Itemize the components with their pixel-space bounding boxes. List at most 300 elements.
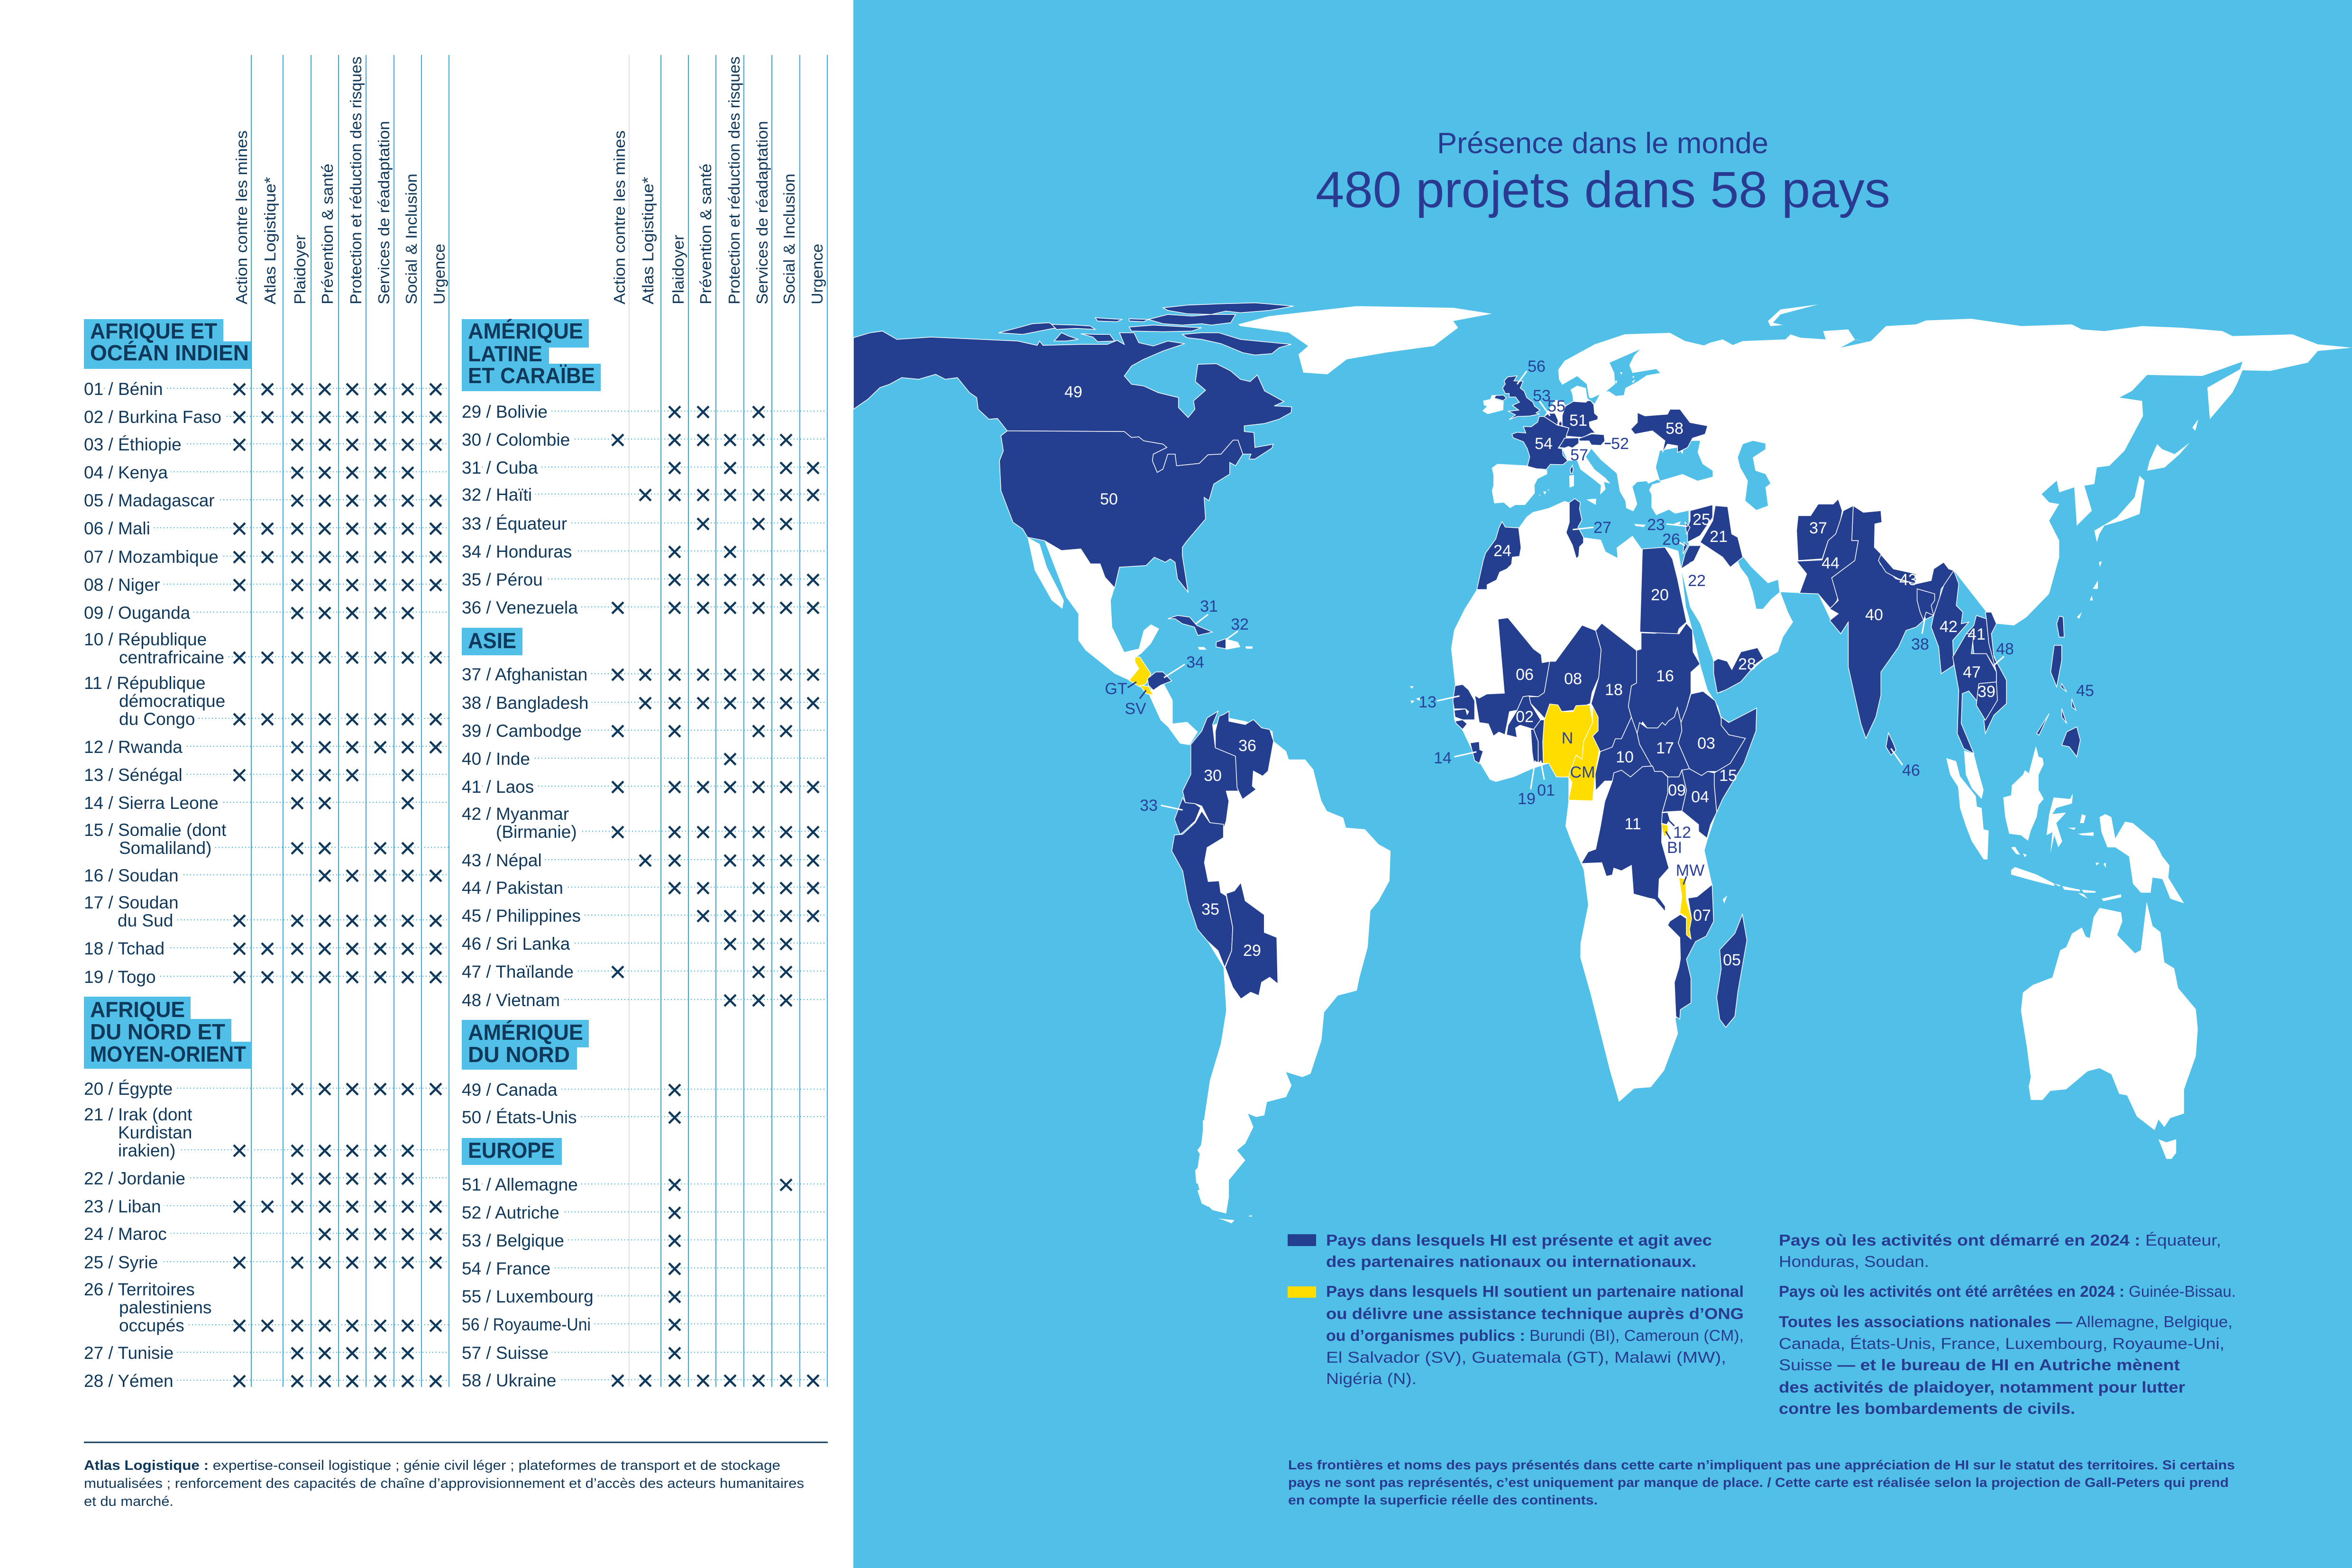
text: activities started in 2024: Pays où les activités ont démarré en 2024 : Équateur, <box>1779 1231 2221 1249</box>
map number labels outside countries: 32 <box>1231 615 1249 633</box>
country: Mali and West Africa block <box>1475 618 1550 736</box>
country: Sri Lanka <box>1886 733 1896 755</box>
row 38 Bangladesh: 38 / Bangladesh <box>462 693 588 713</box>
row 43 Népal <box>462 851 827 870</box>
row 38 Bangladesh <box>462 693 827 713</box>
heading: Afrique et océan Indien: AFRIQUE ET <box>90 319 217 343</box>
rows: Asie <box>462 665 827 1010</box>
map number labels outside countries: 33 <box>1140 797 1158 815</box>
row 32 Haïti <box>462 485 827 504</box>
map number labels on countries: 16 <box>1656 667 1674 685</box>
row 18 Tchad: 18 / Tchad <box>84 939 165 958</box>
map panel background <box>853 0 2352 1568</box>
row 09 Ouganda <box>84 603 449 623</box>
disclaimer: Les frontières et noms des pays présentés dans cette carte n’impliquent pas une appréciation de HI sur le statut des territoires. Si certains <box>1288 1458 2235 1472</box>
footnote: Atlas Logistique: mutualisées ; renforcement des capacités de chaîne d’approvisionnement et d’accès des acteurs humanitaires <box>84 1476 804 1491</box>
row 11 République démocratique du Congo: 11 / République <box>84 673 205 693</box>
country: India <box>1830 505 1954 739</box>
rows: Amérique latine et Caraïbe <box>462 402 827 617</box>
map number labels outside countries: N <box>1562 729 1573 747</box>
row 19 Togo: 19 / Togo <box>84 967 156 987</box>
country: DR Congo <box>1581 766 1669 912</box>
rows: Amérique du Nord <box>462 1080 827 1127</box>
map number labels on countries: 41 <box>1968 625 1986 643</box>
heading: Afrique du Nord et Moyen-Orient: AFRIQUE <box>90 997 185 1022</box>
heading: Afrique du Nord et Moyen-Orient: DU NORD ET <box>90 1019 225 1044</box>
row 21 Irak <box>84 1105 449 1160</box>
text: national associations: Toutes les associations nationales — Allemagne, Belgique, <box>1779 1313 2233 1330</box>
country: Northern Ireland <box>1494 395 1506 401</box>
land: North America whites, Greenland, Caribbean <box>1027 306 1492 745</box>
countries: Asia and Middle East <box>1631 409 2080 757</box>
row 40 Inde <box>462 749 827 769</box>
footnote: Atlas Logistique: Atlas Logistique : expertise-conseil logistique ; génie civil léger ; plateformes de transport et de stockage <box>84 1458 780 1473</box>
row 12 Rwanda: 12 / Rwanda <box>84 737 183 757</box>
title: Présence dans le monde <box>1437 127 1768 160</box>
country: Colombia <box>1183 711 1240 829</box>
map number labels outside countries: 27 <box>1593 519 1611 537</box>
row 11 République démocratique du Congo: du Congo <box>119 709 195 729</box>
row 46 Sri Lanka <box>462 934 827 954</box>
row 51 Allemagne: 51 / Allemagne <box>462 1175 578 1194</box>
heading: Amérique du Nord <box>462 1020 589 1070</box>
row 22 Jordanie <box>84 1169 449 1188</box>
row 32 Haïti: 32 / Haïti <box>462 485 532 504</box>
map number labels on countries: 43 <box>1899 571 1917 589</box>
legend: countries where HI supports a partner: Nigéria (N). <box>1326 1370 1417 1387</box>
legend: countries where HI is present: des partenaires nationaux ou internationaux. <box>1326 1253 1696 1270</box>
row 52 Autriche <box>462 1203 827 1222</box>
row 12 Rwanda <box>84 737 449 757</box>
text: national associations <box>1779 1313 2233 1417</box>
row 24 Maroc <box>84 1224 449 1244</box>
country: Cameroon <box>1568 706 1599 801</box>
country: Sierra Leone <box>1470 742 1483 763</box>
legend: countries where HI supports a partner: El Salvador (SV), Guatemala (GT), Malawi (MW), <box>1326 1348 1726 1366</box>
text: national associations: contre les bombardements de civils. <box>1779 1400 2075 1417</box>
world map <box>853 303 2352 1223</box>
row 10 République centrafricaine: 10 / République <box>84 630 207 649</box>
row 05 Madagascar: 05 / Madagascar <box>84 491 215 510</box>
row 10 République centrafricaine: centrafricaine <box>119 648 224 667</box>
map number labels outside countries: 52 <box>1611 435 1629 453</box>
land: Eurasia, Europe and islands (zoom coords z11) <box>1465 333 1707 608</box>
text: activities started in 2024 <box>1779 1231 2221 1270</box>
country: Sudan <box>1629 623 1700 734</box>
country: Togo and Benin <box>1531 720 1546 763</box>
country: Germany <box>1562 401 1598 438</box>
row 17 Soudan du Sud: 17 / Soudan <box>84 893 179 912</box>
row 34 Honduras: 34 / Honduras <box>462 542 572 561</box>
map number labels on countries: 29 <box>1243 942 1261 960</box>
map number labels on countries: 03 <box>1697 734 1715 752</box>
row 28 Yémen: 28 / Yémen <box>84 1371 174 1391</box>
row 58 Ukraine <box>462 1371 827 1390</box>
country: Ukraine <box>1631 409 1708 452</box>
title <box>1316 127 1890 218</box>
text: activities started in 2024: Honduras, Soudan. <box>1779 1253 1929 1270</box>
country: Venezuela <box>1215 711 1273 799</box>
title: 480 projets dans 58 pays <box>1316 161 1890 218</box>
map number labels outside countries: 22 <box>1688 572 1706 590</box>
column headers: right table: Prévention & santé <box>697 164 714 304</box>
heading: Afrique et océan Indien <box>84 319 251 369</box>
country: Morocco <box>1477 522 1521 589</box>
row 07 Mozambique <box>84 547 449 567</box>
map number labels on countries: 04 <box>1691 788 1709 806</box>
row 21 Irak: irakien) <box>118 1141 175 1160</box>
row 26 Territoires palestiniens occupés: 26 / Territoires <box>84 1280 195 1299</box>
country: Mozambique <box>1668 884 1714 1019</box>
legend: countries where HI supports a partner: ou délivre une assistance technique auprès d’ONG <box>1326 1305 1744 1322</box>
row 13 Sénégal <box>84 765 449 785</box>
row 30 Colombie: 30 / Colombie <box>462 430 570 449</box>
row 03 Éthiopie <box>84 435 449 454</box>
row 25 Syrie: 25 / Syrie <box>84 1253 158 1272</box>
country: Iraq <box>1700 505 1743 567</box>
countries: North and Central America <box>853 303 1294 695</box>
row 52 Autriche: 52 / Autriche <box>462 1203 559 1222</box>
map number labels on countries: 40 <box>1865 606 1883 624</box>
country: Central African Republic <box>1595 717 1653 790</box>
map number labels outside countries: 26 <box>1662 531 1680 549</box>
country: Cambodia <box>1977 682 1997 720</box>
map number labels outside countries: GT <box>1105 680 1127 698</box>
row 20 Égypte <box>84 1079 449 1099</box>
row 24 Maroc: 24 / Maroc <box>84 1224 167 1244</box>
row 26 Territoires palestiniens occupés: palestiniens <box>119 1298 211 1317</box>
row 14 Sierra Leone <box>84 793 449 813</box>
column headers: left table <box>233 56 448 304</box>
text: national associations: Canada, États-Unis, France, Luxembourg, Royaume-Uni, <box>1779 1335 2224 1352</box>
heading: Afrique du Nord et Moyen-Orient: MOYEN-ORIENT <box>90 1042 246 1066</box>
country: Jordan <box>1681 546 1701 569</box>
map number labels outside countries: CM <box>1570 763 1595 781</box>
country: Afghanistan <box>1796 499 1842 560</box>
row 04 Kenya <box>84 463 449 482</box>
row 34 Honduras <box>462 542 827 561</box>
country: Pakistan <box>1796 505 1858 609</box>
row 02 Burkina Faso: 02 / Burkina Faso <box>84 407 221 427</box>
map number labels on countries: 39 <box>1977 683 1995 701</box>
row 45 Philippines <box>462 906 827 926</box>
map number labels outside countries: 13 <box>1419 693 1437 711</box>
country: Corsica <box>1570 466 1573 473</box>
countries: South America <box>1172 711 1278 999</box>
row 11 République démocratique du Congo: démocratique <box>119 691 225 711</box>
row 31 Cuba: 31 / Cuba <box>462 458 538 477</box>
country: Ethiopia <box>1678 691 1746 776</box>
row 55 Luxembourg: 55 / Luxembourg <box>462 1287 594 1306</box>
column headers: right table: Protection et réduction des risques <box>725 56 743 304</box>
map number labels outside countries: 56 <box>1528 358 1546 376</box>
country: Yemen <box>1714 648 1764 693</box>
rows: Europe <box>462 1175 827 1390</box>
row 21 Irak: 21 / Irak (dont <box>84 1105 192 1124</box>
row 23 Liban <box>84 1197 449 1216</box>
row 09 Ouganda: 09 / Ouganda <box>84 603 191 623</box>
map number labels on countries: 44 <box>1821 554 1840 572</box>
row 42 Myanmar: 42 / Myanmar <box>462 804 569 824</box>
column headers: left table: Atlas Logistique* <box>261 177 279 304</box>
row 22 Jordanie: 22 / Jordanie <box>84 1169 185 1188</box>
country: Egypt <box>1640 547 1686 634</box>
row 17 Soudan du Sud <box>84 893 449 930</box>
country: Peru <box>1172 811 1233 967</box>
disclaimer: pays ne sont pas représentés, c’est uniquement par manque de place. / Cette carte est réalisée selon la projection de Gall-Peters qui prend <box>1288 1475 2229 1490</box>
map number labels on countries: 36 <box>1238 737 1256 755</box>
row 50 États-Unis <box>462 1108 827 1127</box>
column headers: right table: Social & Inclusion <box>780 174 798 304</box>
legend: countries where HI supports a partner <box>1288 1283 1744 1387</box>
land: South America <box>1191 718 1391 1223</box>
country: Austria <box>1579 434 1605 445</box>
country: Nigeria <box>1543 704 1592 777</box>
map number labels on countries: 35 <box>1201 900 1219 918</box>
footnote: Atlas Logistique: et du marché. <box>84 1494 174 1509</box>
map number labels on countries: 06 <box>1516 666 1534 684</box>
row 28 Yémen <box>84 1371 449 1391</box>
row 46 Sri Lanka: 46 / Sri Lanka <box>462 934 570 954</box>
heading: Afrique du Nord et Moyen-Orient <box>84 997 251 1069</box>
country: Chad <box>1591 623 1637 752</box>
footnote: Atlas Logistique <box>84 1458 804 1509</box>
map number labels on countries: 08 <box>1564 670 1582 688</box>
row 17 Soudan du Sud: du Sud <box>118 911 173 930</box>
column headers: left table: Urgence <box>430 244 448 304</box>
row 57 Suisse: 57 / Suisse <box>462 1343 549 1363</box>
column headers: left table: Social & Inclusion <box>403 174 420 304</box>
country: Burundi <box>1662 824 1668 837</box>
country: Guatemala <box>1129 657 1151 687</box>
row 41 Laos <box>462 777 827 797</box>
map number labels on countries: 54 <box>1535 435 1553 453</box>
country: Lebanon <box>1685 523 1690 534</box>
row 48 Vietnam <box>462 990 827 1010</box>
row 08 Niger: 08 / Niger <box>84 575 160 595</box>
country: Bolivia <box>1225 882 1278 999</box>
country: Uganda <box>1662 770 1686 812</box>
country: France <box>1512 416 1569 469</box>
row 45 Philippines: 45 / Philippines <box>462 906 581 926</box>
row 01 Bénin <box>84 379 449 399</box>
row 11 République démocratique du Congo <box>84 673 449 729</box>
country: Guinea-Bissau area <box>1455 720 1467 729</box>
country: Bangladesh <box>1917 589 1935 621</box>
row 27 Tunisie: 27 / Tunisie <box>84 1343 174 1363</box>
map number labels on countries: 18 <box>1605 681 1623 699</box>
country: Laos <box>1966 615 1997 672</box>
map number labels outside countries: 45 <box>2076 682 2094 700</box>
row 36 Venezuela: 36 / Venezuela <box>462 598 578 617</box>
map number labels on countries: 51 <box>1569 412 1587 430</box>
heading: Amérique latine et Caraïbe: ET CARAÏBE <box>468 363 595 388</box>
country: Occupied Palestinian Territories <box>1683 542 1688 554</box>
map number labels outside countries: MW <box>1676 862 1704 880</box>
heading: Afrique et océan Indien: OCÉAN INDIEN <box>90 340 249 365</box>
country: Belgium <box>1544 413 1558 425</box>
row 36 Venezuela <box>462 598 827 617</box>
row 40 Inde: 40 / Inde <box>462 749 530 769</box>
heading: Europe: EUROPE <box>468 1138 555 1163</box>
country: Somalia <box>1714 708 1757 812</box>
water: seas over land (Black Sea, Caspian, Persian Gulf) <box>1656 441 1779 609</box>
row 26 Territoires palestiniens occupés <box>84 1280 449 1335</box>
row 35 Pérou: 35 / Pérou <box>462 570 543 589</box>
map number labels on countries: 28 <box>1738 655 1756 673</box>
row 18 Tchad <box>84 939 449 958</box>
legend: countries where HI supports a partner: Pays dans lesquels HI soutient un partenaire national <box>1326 1283 1744 1300</box>
map number labels outside countries: 38 <box>1911 635 1929 653</box>
row 54 France: 54 / France <box>462 1259 550 1278</box>
row 49 Canada <box>462 1080 827 1100</box>
column headers: left table: Action contre les mines <box>233 130 250 304</box>
map number labels on countries: 02 <box>1516 708 1534 726</box>
column headers: right table: Urgence <box>808 244 826 304</box>
row 37 Afghanistan <box>462 665 827 684</box>
row 33 Équateur <box>462 514 827 533</box>
country: Philippines <box>2037 616 2080 757</box>
country: El Salvador <box>1140 685 1153 695</box>
country: Myanmar <box>1931 570 1969 674</box>
map number labels outside countries: 46 <box>1902 761 1920 779</box>
disclaimer: en compte la superficie réelle des continents. <box>1288 1493 1598 1507</box>
column headers: left table: Plaidoyer <box>291 235 309 304</box>
row 44 Pakistan <box>462 878 827 898</box>
row 16 Soudan <box>84 866 449 885</box>
footnote rule <box>84 1441 828 1443</box>
row 04 Kenya: 04 / Kenya <box>84 463 168 482</box>
rows: Afrique et océan Indien <box>84 379 449 987</box>
country: Madagascar <box>1717 915 1747 1027</box>
heading: Amérique du Nord: DU NORD <box>468 1042 570 1067</box>
country: United Kingdom <box>1502 376 1540 420</box>
text: national associations: Suisse — et le bureau de HI en Autriche mènent <box>1779 1356 2180 1374</box>
row 50 États-Unis: 50 / États-Unis <box>462 1108 577 1127</box>
row 26 Territoires palestiniens occupés: occupés <box>119 1316 184 1335</box>
legend: countries where HI supports a partner: ou d’organismes publics : Burundi (BI), Cameroun (CM), <box>1326 1327 1744 1344</box>
country: Thailand <box>1953 634 1996 753</box>
country: Haiti <box>1216 639 1226 649</box>
heading: Asie: ASIE <box>468 628 516 653</box>
row 29 Bolivie: 29 / Bolivie <box>462 402 548 422</box>
row 15 Somalie: 15 / Somalie (dont <box>84 820 227 840</box>
column headers: right table: Services de réadaptation <box>753 121 771 304</box>
column headers: left table: Protection et réduction des risques <box>347 56 365 304</box>
map number labels on countries: 25 <box>1693 511 1711 529</box>
column headers: left table: Services de réadaptation <box>375 121 393 304</box>
row 53 Belgique <box>462 1231 827 1250</box>
map number labels outside countries: 14 <box>1434 749 1452 767</box>
row 07 Mozambique: 07 / Mozambique <box>84 547 219 567</box>
country: Canada and Alaska <box>853 331 1291 472</box>
land: Africa main body <box>1451 608 1757 1102</box>
country: Syria <box>1688 504 1712 542</box>
row 39 Cambodge <box>462 721 827 741</box>
row 51 Allemagne <box>462 1175 827 1194</box>
map number labels outside countries: 57 <box>1570 446 1588 464</box>
row 23 Liban: 23 / Liban <box>84 1197 161 1216</box>
country: Nepal <box>1878 555 1916 584</box>
country: Luxembourg <box>1559 421 1562 426</box>
row 42 Myanmar: (Birmanie) <box>496 822 577 842</box>
map number labels on countries: 07 <box>1693 907 1711 925</box>
country: Kenya <box>1682 769 1717 838</box>
map number labels on countries: 09 <box>1668 781 1686 799</box>
country: Ecuador <box>1174 798 1200 834</box>
column headers: right table <box>611 56 826 304</box>
row 25 Syrie <box>84 1253 449 1272</box>
map number labels on countries: 24 <box>1493 542 1511 560</box>
map number labels outside countries: SV <box>1125 700 1146 718</box>
row 57 Suisse <box>462 1343 827 1363</box>
row 43 Népal: 43 / Népal <box>462 851 542 870</box>
row 39 Cambodge: 39 / Cambodge <box>462 721 582 741</box>
row 37 Afghanistan: 37 / Afghanistan <box>462 665 587 684</box>
row 49 Canada: 49 / Canada <box>462 1080 558 1100</box>
legend: countries where HI is present <box>1288 1231 1712 1270</box>
legend: countries where HI is present: Pays dans lesquels HI est présente et agit avec <box>1326 1231 1712 1249</box>
map number labels on countries: 50 <box>1100 490 1118 508</box>
country: Honduras <box>1147 672 1171 690</box>
row 44 Pakistan: 44 / Pakistan <box>462 878 563 898</box>
row 33 Équateur: 33 / Équateur <box>462 514 567 533</box>
land: Asia <box>1681 304 2352 693</box>
row 30 Colombie <box>462 430 827 449</box>
column headers: right table: Plaidoyer <box>669 235 687 304</box>
map number labels on countries: 49 <box>1064 383 1082 401</box>
country: Senegal <box>1453 685 1475 720</box>
map number labels on countries: 17 <box>1656 739 1674 757</box>
map number labels outside countries: 23 <box>1647 516 1665 534</box>
row 13 Sénégal: 13 / Sénégal <box>84 765 183 785</box>
map number labels on countries: 10 <box>1616 748 1634 766</box>
row 41 Laos: 41 / Laos <box>462 777 534 797</box>
row 55 Luxembourg <box>462 1287 827 1306</box>
row 27 Tunisie <box>84 1343 449 1363</box>
map number labels outside countries: 48 <box>1996 640 2014 658</box>
heading: Amérique latine et Caraïbe: AMÉRIQUE <box>468 319 583 343</box>
map number labels on countries: 47 <box>1963 663 1981 681</box>
row 14 Sierra Leone: 14 / Sierra Leone <box>84 793 219 813</box>
row 06 Mali: 06 / Mali <box>84 519 150 538</box>
column headers: right table: Action contre les mines <box>611 130 628 304</box>
map number labels on countries <box>1064 383 1995 969</box>
row 47 Thaïlande: 47 / Thaïlande <box>462 962 574 981</box>
map number labels on countries: 58 <box>1666 420 1684 438</box>
country: South Sudan <box>1637 707 1690 777</box>
row 02 Burkina Faso <box>84 407 449 427</box>
country: Cuba <box>1168 615 1212 635</box>
country: Tunisia <box>1566 499 1583 559</box>
row 16 Soudan: 16 / Soudan <box>84 866 179 885</box>
row 54 France <box>462 1259 827 1278</box>
row 56 Royaume-Uni <box>462 1315 827 1334</box>
row 31 Cuba <box>462 458 827 477</box>
map number labels outside countries: 19 <box>1518 790 1536 808</box>
land: South-East Asia and Australia <box>1946 746 2198 1159</box>
map number labels outside countries: 01 <box>1537 781 1555 799</box>
map number labels on countries: 05 <box>1723 951 1741 969</box>
heading: Amérique du Nord: AMÉRIQUE <box>468 1020 583 1045</box>
map number labels on countries: 30 <box>1204 767 1222 785</box>
map number labels on countries: 11 <box>1624 815 1641 833</box>
row 35 Pérou <box>462 570 827 589</box>
country: Vietnam <box>1984 612 2006 734</box>
countries: Europe and North Africa (z11) <box>1477 376 1605 589</box>
country: Niger <box>1529 625 1601 720</box>
row 15 Somalie <box>84 820 449 858</box>
